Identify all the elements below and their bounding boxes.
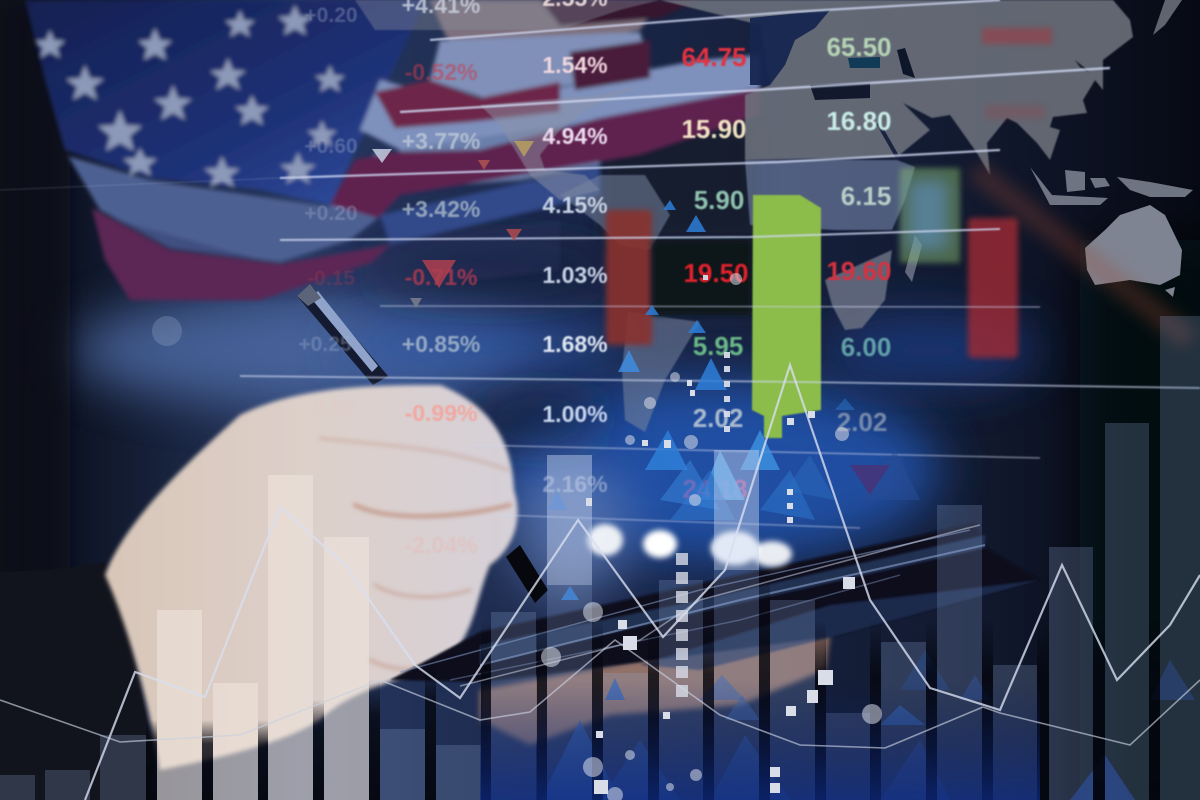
column 2: +3.42%: [402, 196, 480, 222]
column 3: [542, 0, 608, 497]
column 3: 4.94%: [542, 123, 608, 149]
column 5: [826, 32, 892, 437]
map: Europe and inland seas: [750, 10, 915, 158]
tablet edge stripes: [400, 530, 985, 680]
pen: [297, 284, 548, 603]
column 4: 5.95: [693, 331, 743, 361]
column 1: +0.60: [304, 135, 358, 158]
column 5: 6.00: [841, 332, 891, 362]
scattered squares: [618, 620, 627, 629]
column 5: 16.80: [826, 106, 892, 136]
column 5: 6.15: [841, 181, 891, 211]
column 4: 15.90: [681, 114, 747, 144]
white bars over the hand: [157, 475, 369, 800]
column 1: +0.20: [304, 202, 358, 225]
column 1: -0.02: [307, 397, 355, 420]
sleeve: [0, 562, 155, 800]
upper line: [85, 365, 1200, 800]
red down triangles: [422, 260, 456, 288]
price tickers: [298, 0, 892, 558]
column 1: +0.20: [304, 4, 358, 27]
tablet and lower hand: [390, 523, 1040, 745]
vertical square column lower: [676, 553, 688, 697]
map: Kamchatka: [1153, 0, 1182, 35]
map: Eurasia and north Africa: [660, 0, 1133, 175]
tablet body: [390, 523, 1040, 682]
flag red stripes: [92, 208, 390, 300]
column 4: 5.90: [694, 185, 744, 215]
flag canton: [25, 0, 425, 205]
column 4: 64.75: [681, 42, 747, 72]
column 3: 1.00%: [542, 401, 608, 427]
column 1: +0.25: [298, 333, 352, 356]
column 3: 4.15%: [542, 192, 608, 218]
map: Madagascar: [905, 235, 922, 282]
column 2: -0.71%: [405, 264, 477, 290]
American flag: [25, 0, 760, 305]
map: South America: [560, 175, 700, 432]
map: North America: [355, 0, 660, 30]
map: Africa: [745, 160, 915, 230]
column 5: 2.02: [837, 407, 887, 437]
flag white stripes: [68, 156, 378, 262]
red candle right: [968, 218, 1018, 358]
bokeh lights: [587, 524, 792, 567]
column 2: -2.04%: [405, 532, 477, 558]
finger creases: [320, 438, 510, 669]
circles: [152, 273, 882, 800]
column 4: 24.18: [682, 474, 748, 504]
map: Indonesia: [1030, 167, 1193, 205]
lower line: [0, 640, 1200, 748]
column 2: +0.85%: [402, 331, 480, 357]
vertical square column upper: [703, 275, 730, 432]
column 4: [681, 42, 749, 504]
red candle left: [606, 210, 652, 345]
column 3: 1.54%: [542, 52, 608, 78]
column 1: [298, 4, 358, 420]
column 3: 1.68%: [542, 331, 608, 357]
candlesticks: [606, 168, 1190, 438]
world map: [355, 0, 1193, 432]
tablet glare line: [460, 525, 980, 686]
data dots and squares: [152, 273, 882, 800]
map: Australia: [1085, 205, 1182, 285]
column 5: 19.60: [826, 256, 892, 286]
dark bar gaps: [146, 570, 1160, 800]
column 4: 19.50: [683, 258, 749, 288]
column 4: 2.02: [693, 403, 743, 433]
dim red upper right numbers: [982, 28, 1052, 119]
ticker separator light lines: [0, 0, 1200, 528]
blue triangles: [372, 141, 1195, 800]
column 2: [402, 0, 480, 558]
hand shape: [105, 385, 518, 770]
column 2: +3.77%: [402, 128, 480, 154]
flag stars: [35, 5, 345, 188]
bright green candle: [752, 195, 821, 438]
dim green candle: [900, 168, 960, 263]
translucent bars: [0, 316, 1200, 800]
column 5: 65.50: [826, 32, 892, 62]
column 2: -0.52%: [405, 59, 477, 85]
writing hand: [0, 284, 548, 800]
lower fingers: [480, 635, 830, 745]
column 1: -0.15: [307, 267, 355, 290]
column 2: -0.99%: [405, 400, 477, 426]
column 3: 1.03%: [542, 262, 608, 288]
column 3: 2.16%: [542, 471, 608, 497]
line charts: [0, 365, 1200, 800]
bar chart: [0, 316, 1200, 800]
